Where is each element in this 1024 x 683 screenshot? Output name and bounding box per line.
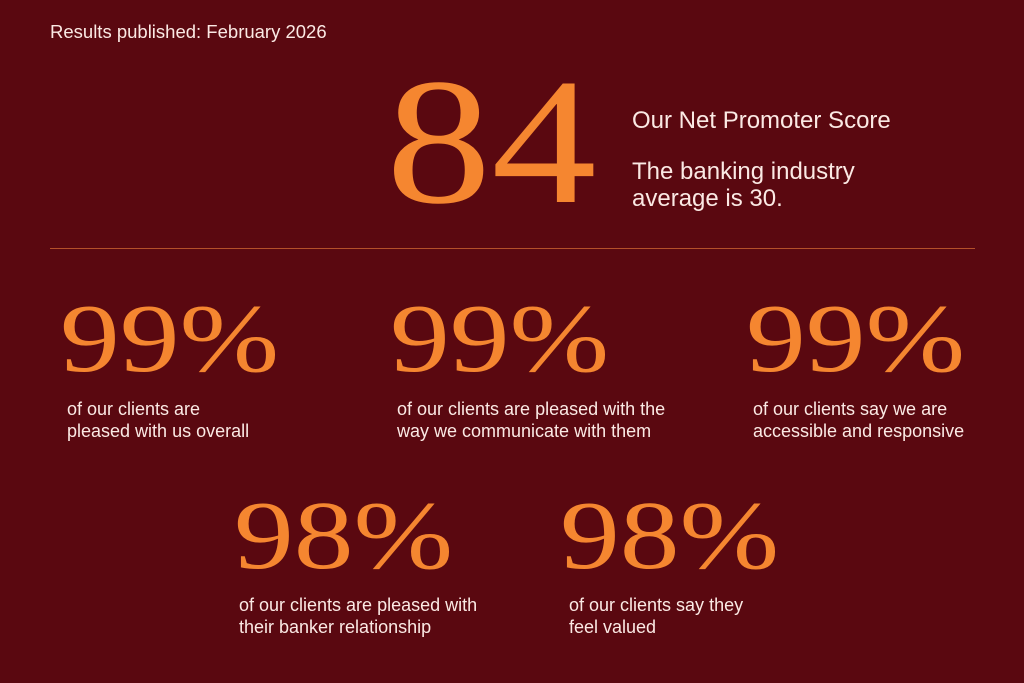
stat: overall: of our clients are xyxy=(67,399,200,419)
divider xyxy=(50,248,975,249)
stat: accessible: of our clients say we are xyxy=(753,399,947,419)
stat: overall: pleased with us overall xyxy=(67,421,249,441)
NPS caption: Our Net Promoter Score The banking industry xyxy=(632,107,891,185)
stat: accessible: 99% xyxy=(746,285,965,393)
stat: overall xyxy=(60,285,279,441)
stat: communication xyxy=(390,285,665,441)
stat: communication: of our clients are pleased with the xyxy=(397,399,665,419)
stat: feel valued: of our clients say they xyxy=(569,595,743,615)
publication date: Results published: February 2026 xyxy=(50,21,327,42)
stat: accessible xyxy=(746,285,965,441)
stat: feel valued xyxy=(560,482,779,637)
stat: banker relationship: of our clients are pleased with xyxy=(239,595,477,615)
NPS caption: average is 30. xyxy=(632,185,783,212)
stat: banker relationship: their banker relationship xyxy=(239,617,431,637)
NPS number: 84 xyxy=(386,42,597,241)
stat: communication: 99% xyxy=(390,285,609,393)
stat: banker relationship: 98% xyxy=(234,482,453,590)
stat: feel valued: feel valued xyxy=(569,617,656,637)
stat: banker relationship xyxy=(234,482,477,637)
stat: communication: way we communicate with them xyxy=(397,421,651,441)
stat: overall: 99% xyxy=(60,285,279,393)
stat: accessible: accessible and responsive xyxy=(753,421,964,441)
stat: feel valued: 98% xyxy=(560,482,779,590)
